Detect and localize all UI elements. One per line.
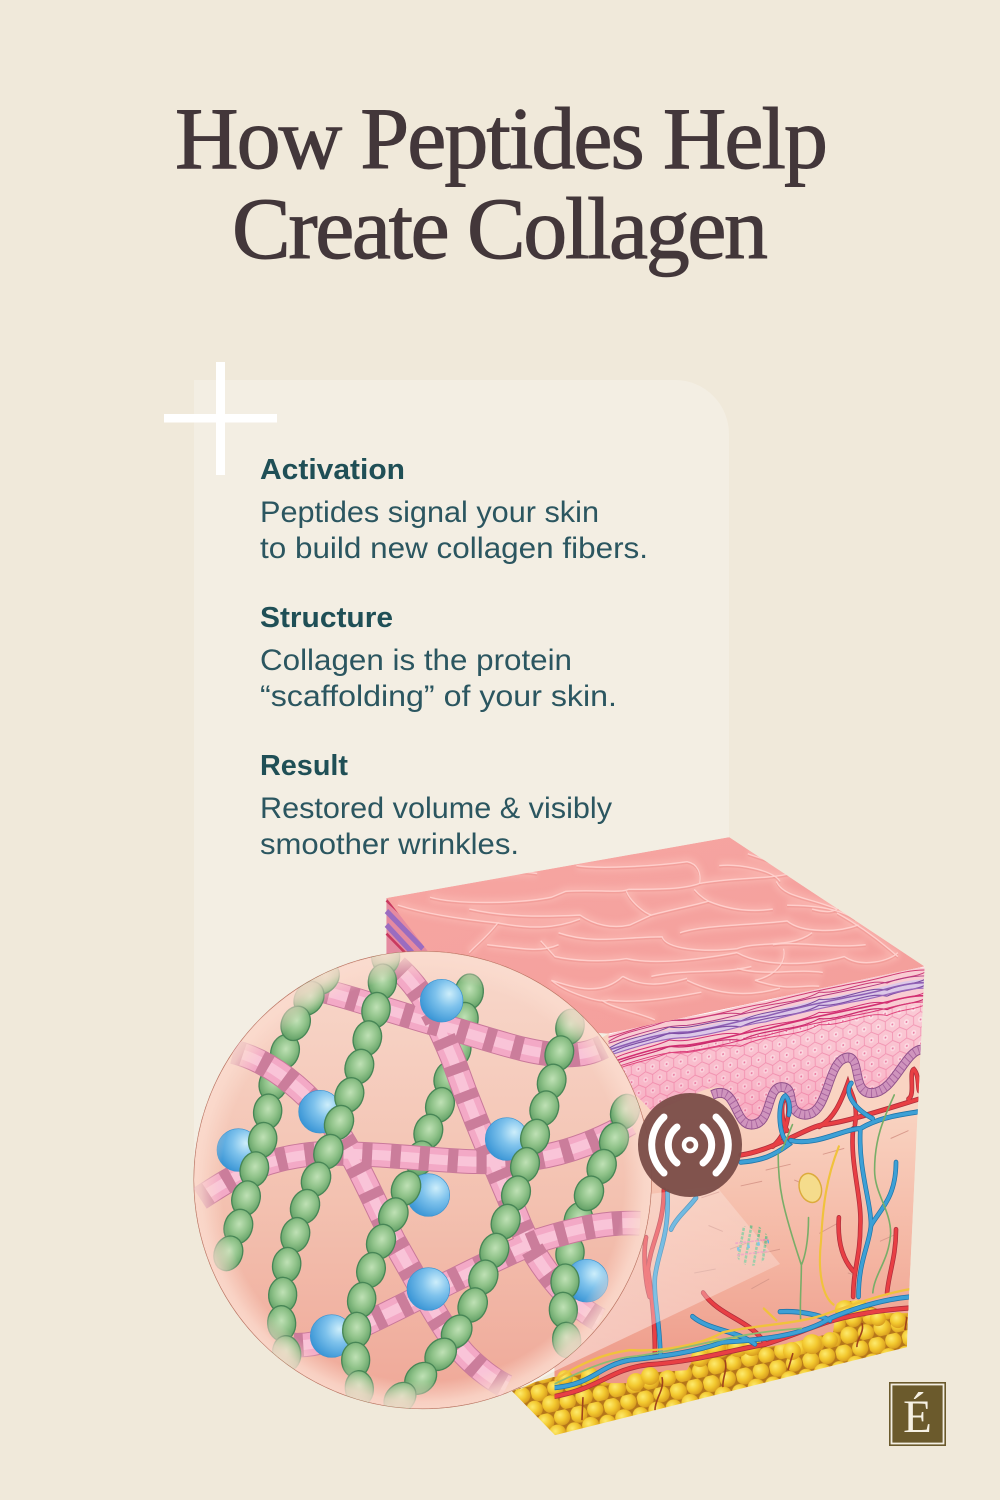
blood vessels blue — [555, 1083, 919, 1388]
text block: structure: “scaffolding” of your skin. — [260, 680, 617, 713]
upper green peptide strands — [209, 939, 644, 1421]
skin surface top face — [386, 837, 925, 1034]
gland — [798, 1172, 822, 1204]
title: How Peptides Help — [175, 91, 828, 188]
text block: activation — [260, 454, 648, 565]
logo: É — [903, 1391, 932, 1443]
icon: signal badge — [638, 1093, 742, 1197]
left side face — [386, 898, 451, 957]
blood vessel red outlines — [555, 1069, 919, 1396]
nerves — [555, 1095, 912, 1384]
zoom beam — [520, 1186, 780, 1390]
title: Create Collagen — [232, 181, 768, 278]
pink collagen fibres — [200, 967, 640, 1387]
skin cross-section cube — [386, 837, 925, 1435]
text block: activation: to build new collagen fibers. — [260, 532, 648, 565]
fat crevices — [582, 1317, 907, 1420]
text block: activation: Activation — [260, 454, 405, 486]
fat bumps — [557, 1300, 906, 1391]
basal layer wave — [712, 1050, 921, 1125]
blood vessel blue outlines — [555, 1083, 919, 1388]
magnified collagen circle — [194, 939, 651, 1421]
stratum corneum band — [609, 966, 925, 1069]
lower green peptide strand segments — [255, 973, 596, 1273]
text block: activation: Peptides signal your skin — [260, 496, 599, 529]
subcutaneous fat layer — [512, 1300, 908, 1435]
text block: result: Result — [260, 750, 348, 782]
text block: result: smoother wrinkles. — [260, 828, 519, 861]
text block: structure: Collagen is the protein — [260, 644, 572, 677]
right front face — [551, 966, 925, 1435]
vessels and nerves — [555, 1069, 919, 1396]
plus decoration — [164, 362, 277, 475]
text block: structure: Structure — [260, 602, 393, 634]
text block: result — [260, 750, 612, 861]
cell layer shading — [624, 1004, 922, 1120]
blood vessels red — [555, 1069, 919, 1396]
blue molecules — [217, 979, 608, 1357]
dermis — [554, 1034, 920, 1435]
dermis creases — [694, 1131, 909, 1289]
soft edge of lens — [194, 951, 651, 1409]
title — [175, 91, 828, 278]
disc — [194, 951, 651, 1409]
logo — [889, 1382, 946, 1446]
stratum fibre lines — [609, 966, 925, 1074]
target collagen spot — [735, 1226, 769, 1267]
epidermis cell layer — [609, 1002, 925, 1125]
text block: structure — [260, 602, 617, 713]
panel: text card — [194, 380, 729, 1180]
text block: result: Restored volume & visibly — [260, 792, 612, 825]
